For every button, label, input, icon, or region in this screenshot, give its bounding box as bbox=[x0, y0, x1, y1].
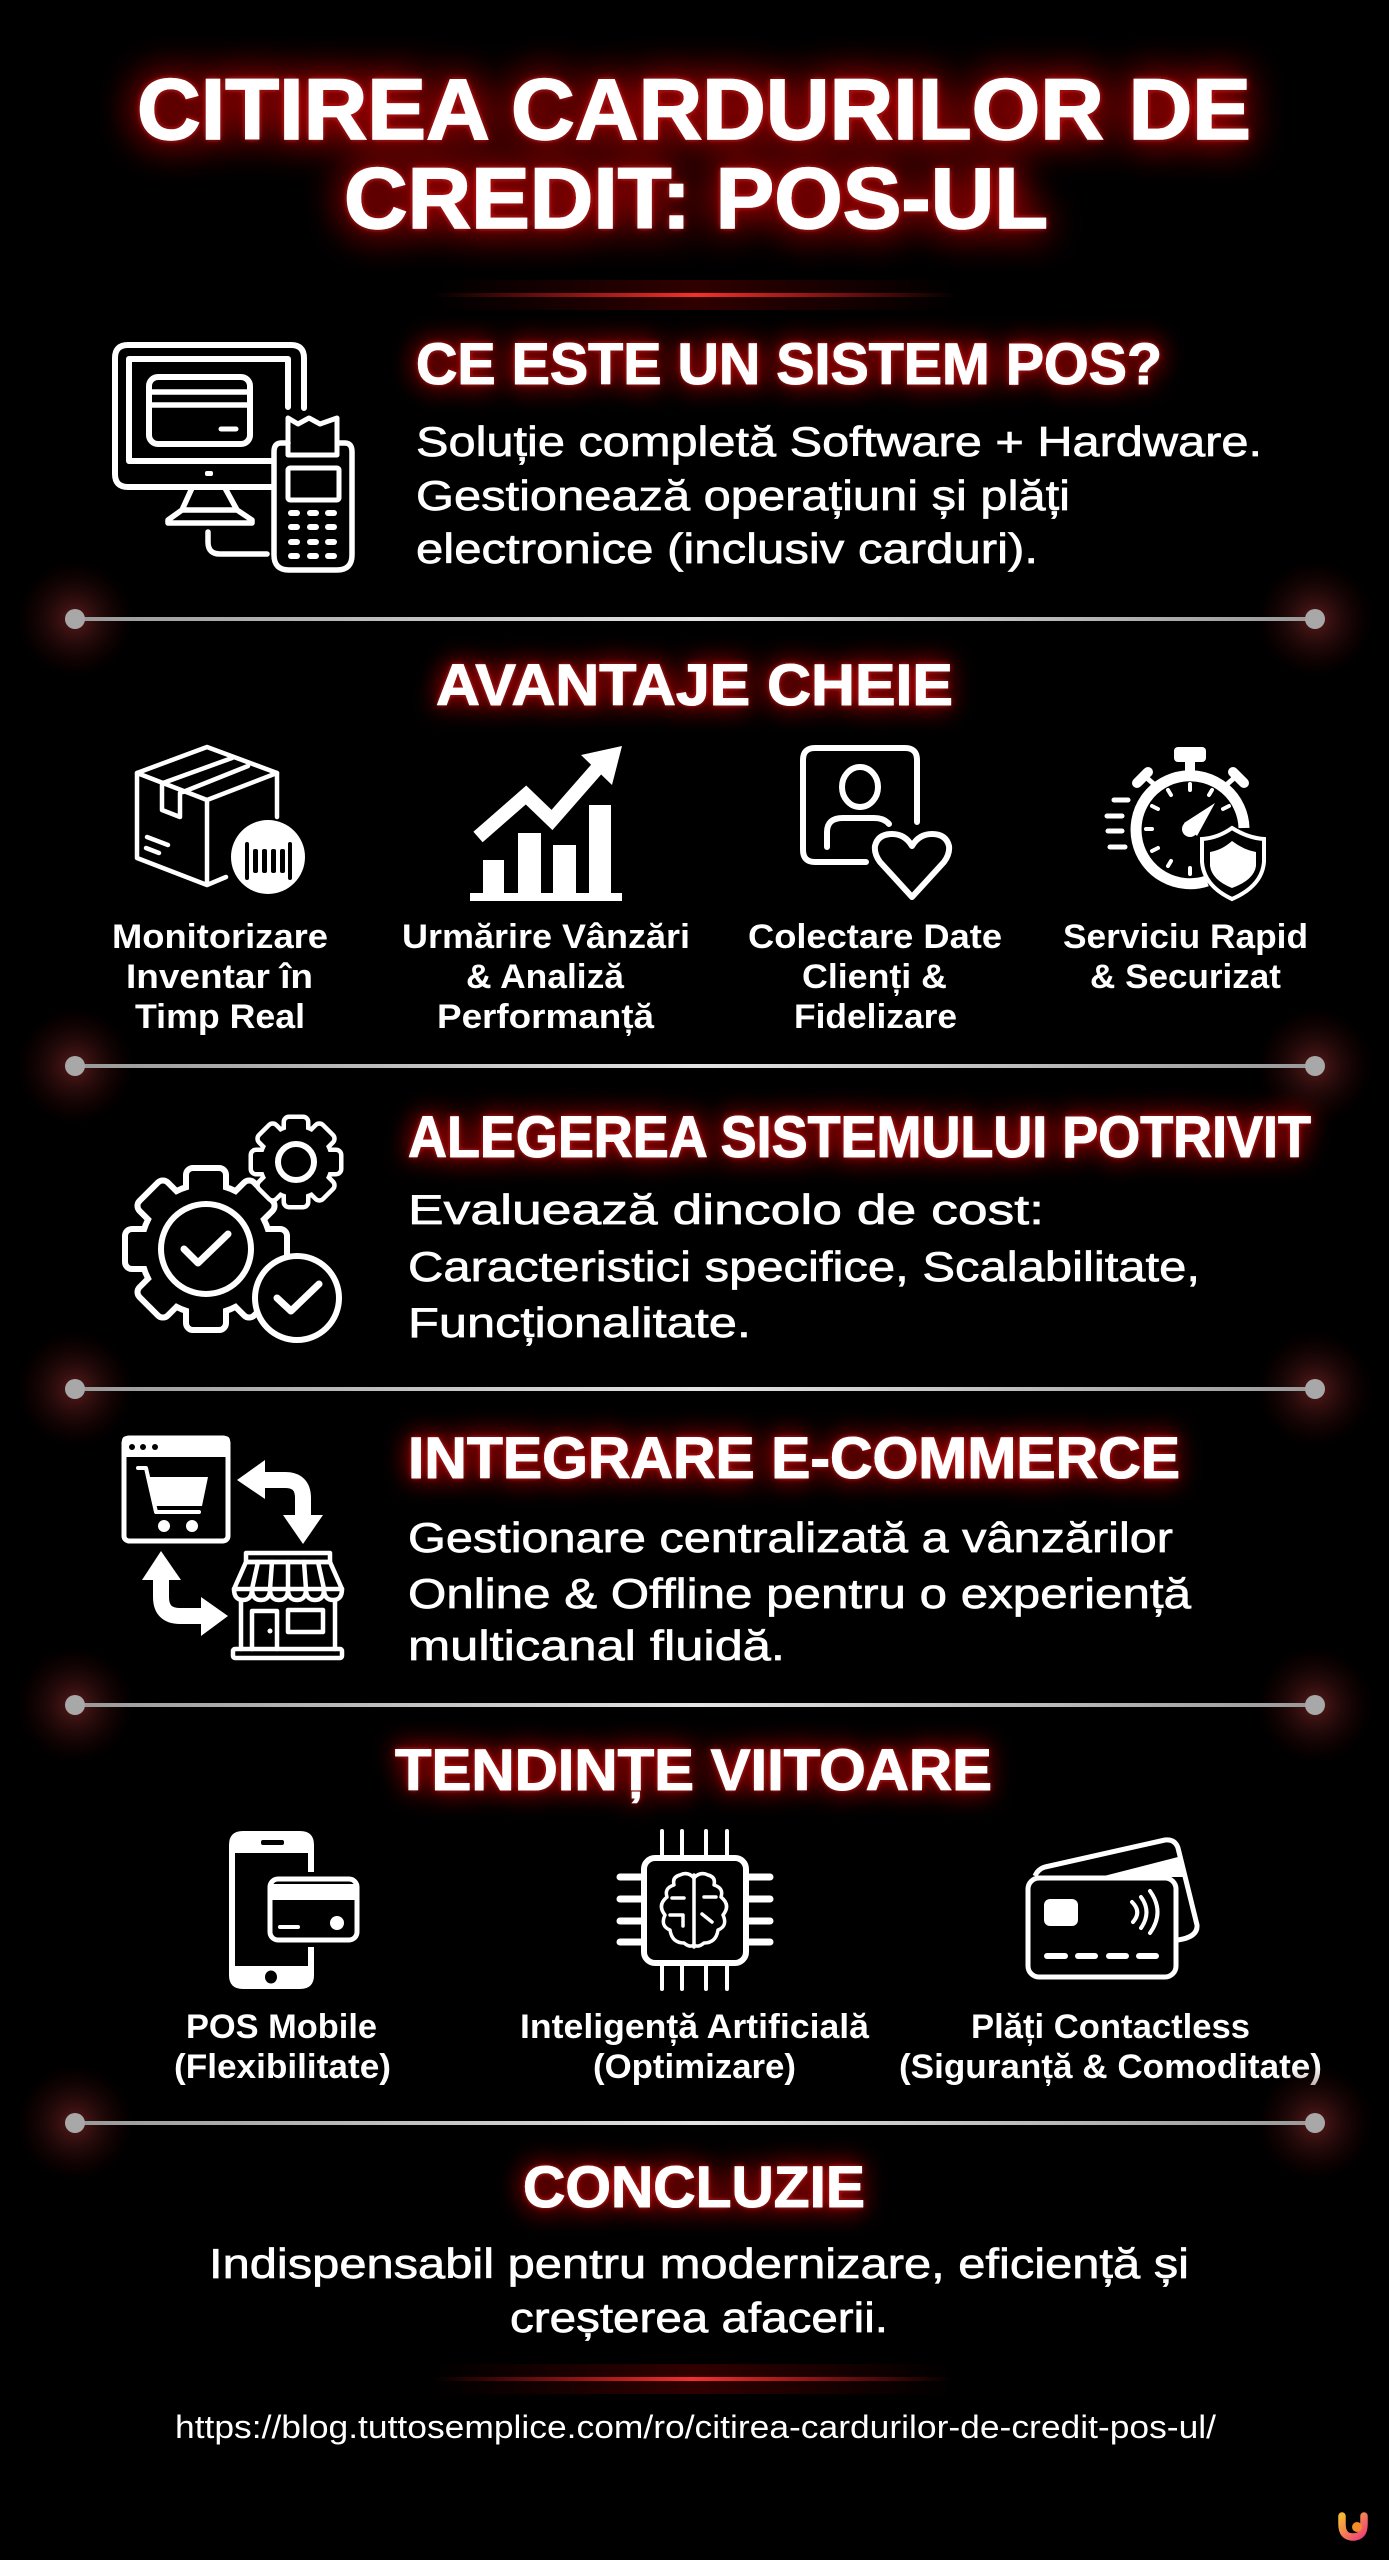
label: serviciu: Serviciu Rapid bbox=[1063, 918, 1308, 956]
label: inteligenta artificiala: (Optimizare) bbox=[593, 2048, 796, 2086]
text block: electronice (inclusiv carduri). bbox=[416, 525, 1038, 572]
text block: Gestionare centralizată a vânzărilor bbox=[408, 1514, 1173, 1561]
label: inventar: Monitorizare bbox=[112, 918, 328, 956]
text block: Gestionează operațiuni și plăți bbox=[416, 472, 1070, 519]
top red divider bbox=[434, 280, 957, 310]
icon: online and offline store bbox=[122, 1436, 342, 1658]
label: clienti: Colectare Date bbox=[748, 918, 1002, 956]
label: POS mobile: POS Mobile bbox=[186, 2008, 377, 2046]
panel: tendinte viitoare bbox=[174, 1738, 1322, 2086]
label: serviciu: & Securizat bbox=[1090, 958, 1281, 996]
label: inteligenta artificiala: Inteligență Artificială bbox=[520, 2008, 870, 2046]
label: inventar bbox=[112, 918, 328, 1036]
panel: alegerea sistemului bbox=[128, 1105, 1311, 1346]
heading: ALEGEREA SISTEMULUI POTRIVIT bbox=[408, 1105, 1311, 1170]
text block: Online & Offline pentru o experiență bbox=[408, 1570, 1192, 1617]
label: plati contactless: Plăți Contactless bbox=[971, 2008, 1250, 2046]
label: vanzari: & Analiză bbox=[466, 958, 625, 996]
panel: concluzie bbox=[209, 2155, 1189, 2341]
divider 2 bbox=[17, 1008, 1373, 1124]
text block bbox=[408, 1514, 1192, 1669]
icon: logo bbox=[1342, 2516, 1364, 2537]
panel: ce este un sistem POS bbox=[115, 332, 1262, 572]
heading: AVANTAJE CHEIE bbox=[436, 653, 953, 718]
label: vanzari: Performanță bbox=[437, 998, 655, 1036]
bottom red divider bbox=[432, 2364, 953, 2394]
text block: Indispensabil pentru modernizare, eficiență și bbox=[209, 2240, 1189, 2287]
label: clienti bbox=[748, 918, 1002, 1036]
text block bbox=[209, 2240, 1189, 2341]
text block: Soluție completă Software + Hardware. bbox=[416, 418, 1262, 465]
label: POS mobile bbox=[174, 2008, 391, 2086]
divider 3 bbox=[17, 1331, 1373, 1447]
label: clienti: Fidelizare bbox=[794, 998, 957, 1036]
label: inteligenta artificiala bbox=[520, 2008, 870, 2086]
title: CITIREA CARDURILOR DE bbox=[137, 62, 1251, 158]
icon: inventory box with barcode bbox=[137, 747, 305, 894]
label: POS mobile: (Flexibilitate) bbox=[174, 2048, 391, 2086]
label: clienti: Clienți & bbox=[802, 958, 947, 996]
icon: contactless cards bbox=[1028, 1840, 1197, 1977]
title bbox=[137, 62, 1251, 247]
heading: CONCLUZIE bbox=[523, 2155, 865, 2220]
text block: creșterea afacerii. bbox=[510, 2294, 888, 2341]
heading: CE ESTE UN SISTEM POS? bbox=[416, 332, 1162, 397]
divider 4 bbox=[17, 1647, 1373, 1763]
text block bbox=[408, 1186, 1200, 1346]
icon: mobile POS bbox=[229, 1831, 357, 1989]
label: plati contactless bbox=[899, 2008, 1322, 2086]
heading: INTEGRARE E-COMMERCE bbox=[408, 1426, 1180, 1491]
heading: TENDINȚE VIITOARE bbox=[395, 1738, 992, 1803]
divider 5 bbox=[17, 2065, 1373, 2181]
text block: multicanal fluidă. bbox=[408, 1622, 785, 1669]
label: vanzari: Urmărire Vânzări bbox=[402, 918, 690, 956]
icon: computer and POS terminal bbox=[115, 345, 352, 570]
text block: Evaluează dincolo de cost: bbox=[408, 1186, 1044, 1233]
label: inventar: Timp Real bbox=[135, 998, 305, 1036]
text block: Caracteristici specifice, Scalabilitate, bbox=[408, 1243, 1200, 1290]
label: plati contactless: (Siguranță & Comoditate) bbox=[899, 2048, 1322, 2086]
title: CREDIT: POS-UL bbox=[344, 151, 1048, 247]
icon: client data bbox=[803, 748, 949, 897]
icon: AI chip bbox=[620, 1831, 770, 1989]
icon: gears and checks bbox=[128, 1119, 339, 1340]
label: serviciu bbox=[1063, 918, 1308, 996]
icon: sales chart bbox=[470, 746, 622, 901]
panel: integrare e-commerce bbox=[122, 1426, 1192, 1669]
panel: avantaje cheie bbox=[112, 653, 1308, 1036]
divider 1 bbox=[17, 561, 1373, 677]
label: vanzari bbox=[402, 918, 690, 1036]
label: inventar: Inventar în bbox=[126, 958, 313, 996]
text block: Funcționalitate. bbox=[408, 1299, 751, 1346]
text block bbox=[416, 418, 1262, 572]
icon: stopwatch with shield bbox=[1107, 747, 1264, 899]
source URL: https://blog.tuttosemplice.com/ro/citirea-cardurilor-de-credit-pos-ul/ bbox=[175, 2409, 1216, 2445]
